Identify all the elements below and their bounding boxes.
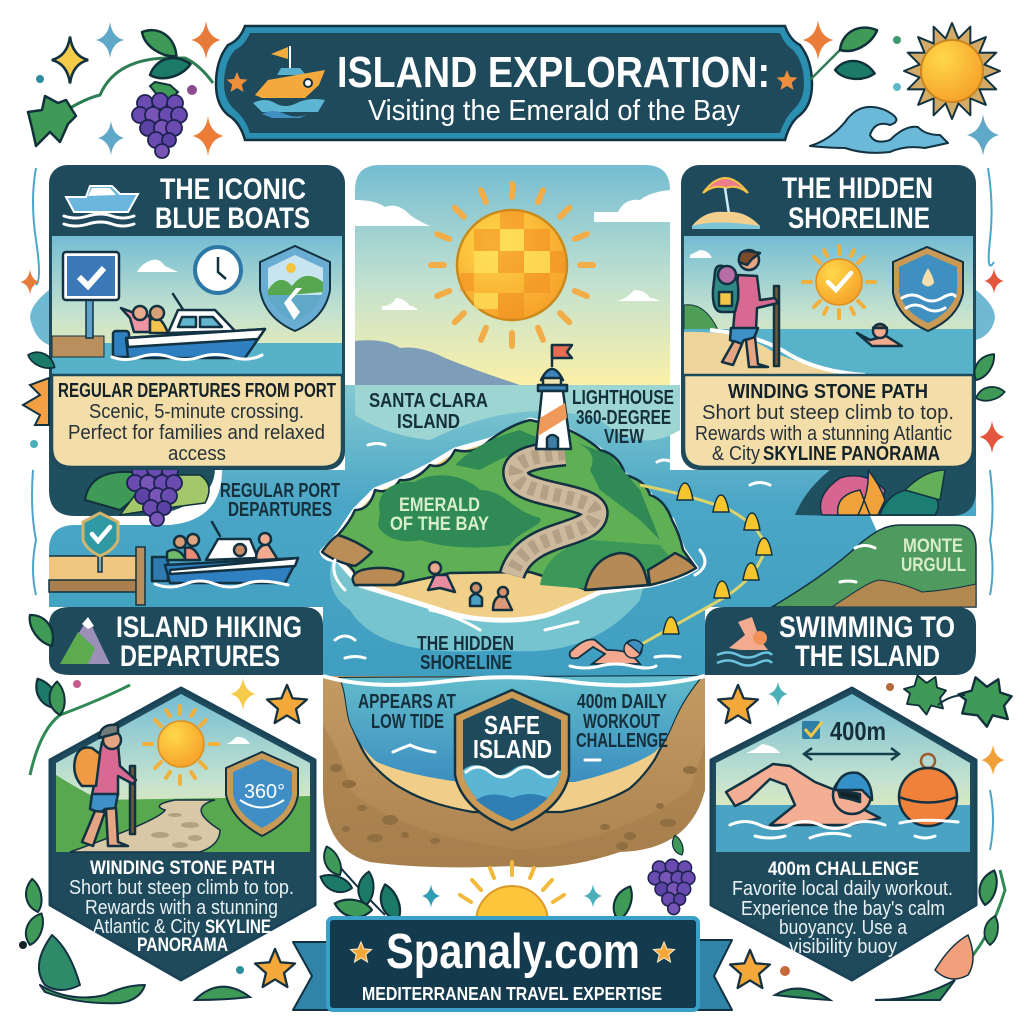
beige text block: Rewards with a stunning Atlantic (695, 423, 952, 445)
heading: island hiking departures: DEPARTURES (120, 640, 280, 673)
shield check (83, 513, 118, 572)
label: monte urgull: MONTE (903, 536, 963, 557)
brand name: Spanaly.com (386, 925, 640, 979)
hexagon text (69, 858, 294, 956)
heading: swimming to the island: THE ISLAND (795, 640, 940, 673)
map labels (220, 387, 674, 752)
rocks (322, 535, 696, 590)
hexagon text: Favorite local daily workout. (732, 878, 953, 900)
beige text block (52, 375, 342, 467)
shield water (893, 247, 963, 331)
map labels: EMERALD (399, 495, 480, 516)
panel heading: THE HIDDEN (782, 172, 933, 205)
hexagon text: Short but steep climb to top. (69, 877, 294, 899)
badge 360 (226, 752, 298, 836)
lighthouse (536, 345, 572, 449)
dock (49, 547, 145, 605)
decoration: footer sun, leaves, grapes (317, 834, 695, 958)
beige text block: & City (712, 443, 760, 465)
map labels: CHALLENGE (576, 730, 668, 752)
header icon: beach umbrella (692, 178, 760, 229)
beige text block: Scenic, 5-minute crossing. (89, 401, 304, 423)
footer banner (293, 918, 732, 1010)
map labels: THE HIDDEN (417, 633, 514, 655)
buoy (899, 754, 957, 826)
icon: mountain (60, 617, 110, 664)
decoration: side ornaments (20, 168, 1006, 595)
icon: swimmer (717, 617, 772, 666)
vine leaf (28, 96, 76, 146)
sun (144, 706, 250, 784)
panel: right hexagon, 400m challenge (711, 688, 976, 980)
hexagon text: Experience the bay's calm (741, 898, 945, 920)
swimmer in shoreline (857, 324, 902, 346)
map labels: LOW TIDE (371, 711, 444, 733)
heading: island hiking departures: ISLAND HIKING (116, 611, 302, 644)
subtitle text: Visiting the Emerald of the Bay (368, 95, 740, 127)
beige text block: REGULAR DEPARTURES FROM PORT (58, 380, 336, 402)
beige text block (684, 375, 973, 467)
ribbon left (293, 942, 332, 1010)
hexagon text: SKYLINE (205, 917, 271, 938)
heading: swimming to the island: SWIMMING TO (779, 611, 955, 644)
icon: star right (777, 70, 797, 90)
picture area (684, 236, 973, 376)
panel: left dark underlay with vine and grapes (49, 440, 215, 526)
sun check (803, 246, 875, 318)
stone path (512, 453, 595, 575)
ribbon right (695, 940, 732, 1010)
hiker (74, 725, 136, 846)
hiker (713, 250, 779, 367)
port scene (49, 513, 298, 605)
map labels: ISLAND (397, 411, 460, 433)
header icon: boat (64, 186, 138, 226)
heading: island hiking departures (49, 607, 323, 675)
panel heading: THE ICONIC (160, 173, 306, 206)
panel: left hexagon, winding stone path (50, 688, 315, 980)
icon: decorative sun (904, 23, 1000, 119)
decoration: top right leaves, sun, wave (803, 20, 1000, 156)
badge 360: 360° (244, 781, 285, 803)
hexagon text: PANORAMA (137, 935, 228, 956)
map labels: WORKOUT (583, 711, 660, 733)
label: urgull: URGULL (901, 555, 966, 576)
small swimmer (570, 640, 656, 668)
hexagon text: 400m CHALLENGE (768, 859, 919, 880)
sea waves (334, 444, 875, 658)
footer star left (351, 942, 371, 962)
panel heading (782, 172, 933, 235)
safe island shield (455, 690, 569, 830)
hexagon text: buoyancy. Use a (779, 917, 908, 939)
beige text block: Short but steep climb to top. (702, 402, 954, 424)
map labels: 400m DAILY (577, 691, 668, 713)
hexagon text: visibility buoy (789, 936, 897, 958)
map labels: REGULAR PORT (220, 480, 340, 502)
distance marker (746, 716, 899, 760)
icon: distant sun (431, 184, 593, 346)
map labels: 360-DEGREE (576, 407, 671, 429)
beige text block: Perfect for families and relaxed (68, 422, 325, 444)
panel: the iconic blue boats (49, 165, 345, 470)
panel heading (155, 173, 310, 235)
white gap above monte urgull (870, 516, 976, 560)
panel: central map scene (49, 165, 976, 680)
island (322, 420, 696, 620)
panel heading: SHORELINE (788, 202, 930, 235)
icon: grapes (132, 82, 187, 158)
map labels: DEPARTURES (228, 499, 332, 521)
map labels: SANTA CLARA (369, 390, 488, 412)
beige text block: access (168, 443, 226, 465)
decoration: lower right vines, stars, fruit (718, 676, 1012, 1000)
distance marker: 400m (830, 716, 886, 746)
beige text block: SKYLINE PANORAMA (763, 443, 940, 465)
sky with clouds and hills (355, 165, 670, 385)
icon: star left (227, 72, 247, 92)
hexagon text: Rewards with a stunning (85, 897, 278, 919)
footer star right (654, 942, 674, 962)
map labels: OF THE BAY (390, 514, 489, 535)
figures on beach (428, 562, 512, 610)
buoy line (640, 483, 772, 645)
panel: bottom land bowl (323, 676, 705, 867)
decoration: top left vine, grapes, stars (28, 21, 223, 158)
map labels: LIGHTHOUSE (572, 387, 674, 409)
map labels: VIEW (604, 426, 644, 448)
icon: wave (810, 107, 948, 153)
icon: boat (253, 46, 325, 118)
port boat (152, 522, 298, 583)
hexagon text: WINDING STONE PATH (90, 858, 275, 879)
hexagon text (732, 859, 953, 958)
panel heading: BLUE BOATS (155, 202, 310, 235)
map labels: SHORELINE (420, 652, 512, 674)
beige text block: WINDING STONE PATH (728, 381, 928, 403)
safe island shield: SAFE (484, 710, 540, 740)
sea (49, 385, 976, 680)
hexagon text: Atlantic & City (93, 916, 200, 938)
decoration: lower left vines and stars (19, 609, 307, 1003)
heading: swimming to the island (705, 607, 976, 675)
panel: the hidden shoreline (681, 165, 976, 470)
panel: right dark underlay with flower (782, 440, 976, 516)
brand tagline: MEDITERRANEAN TRAVEL EXPERTISE (362, 984, 662, 1004)
swimmer (726, 764, 880, 825)
title text: ISLAND EXPLORATION: (337, 48, 770, 97)
picture area (52, 236, 342, 376)
boat (113, 294, 265, 358)
safe island shield: ISLAND (473, 734, 552, 764)
panel: monte urgull (772, 525, 976, 607)
map labels: APPEARS AT (358, 691, 456, 713)
title banner (216, 26, 812, 140)
